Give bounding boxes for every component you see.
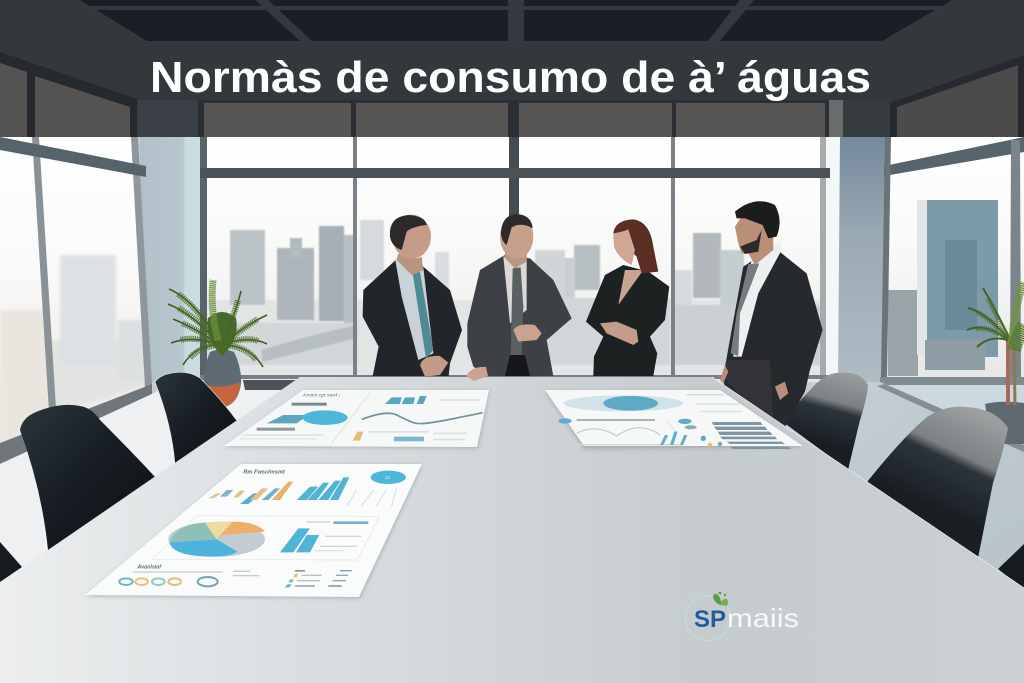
ceiling recess [80,0,952,41]
chair: left edge [0,542,22,582]
plant: left [168,280,267,407]
left column in band [137,100,198,137]
person 4: man with beard [720,201,823,430]
bar chart: mixed [208,482,293,504]
window sill right [885,385,1024,447]
logo text: SP [694,606,726,633]
conference table [0,377,1024,683]
document: near report with charts [85,464,422,598]
upper left panes [0,52,140,137]
document: near report with charts: 12 [385,475,391,480]
logo leaves [713,592,728,606]
right wall column [838,137,888,382]
bar chart: outline [347,488,397,506]
left window [0,137,152,464]
right column in band [843,100,890,137]
person 2: man in grey suit [467,214,572,376]
ring indicators [119,577,218,586]
logo: SPmaiis: maiis [727,603,799,633]
person 3: woman [586,219,669,376]
ceiling beams [86,0,946,41]
plant pot [204,350,241,407]
skyline [207,220,827,376]
bar chart: blue [297,477,349,500]
floor right [700,382,1024,620]
chart panel frame [152,516,379,560]
document heading: Kmsm cpr swsf ♩ [303,393,343,399]
chair: far right back [783,372,868,470]
badge [371,471,406,484]
left wall column [140,137,200,382]
upper centre panes [198,100,832,137]
person 1: man with teal tie [363,215,462,377]
sill behind left plant [243,380,300,390]
logo: SPmaiis [686,592,799,640]
logo ring [686,596,730,640]
window frames [200,137,207,380]
person 2 hand on table [466,367,488,381]
upper right panes [890,55,1024,137]
centre window with skyline [198,137,840,382]
leaves [967,282,1024,405]
leaves [168,280,267,367]
title: Normàs de consumo de à’ águas [150,53,871,102]
legend [285,570,352,587]
document: far right report [545,390,803,449]
chair: near left back [20,405,156,550]
section heading: Avanlslaf [136,564,162,570]
floor left [0,382,320,620]
table edge highlight [712,377,1024,588]
document: far left report [224,390,489,448]
document heading: Rm Fwsclmsmt [243,469,286,475]
chair: near right back [867,407,1008,558]
right window [880,137,1024,385]
chairs behind table [0,372,1024,590]
plant: right [967,282,1024,444]
title band with darkened ceiling and upper windows [0,0,1024,137]
bar chart: large bars [280,528,319,552]
business people [363,201,823,430]
plant pot [985,402,1024,444]
chair: far left back [155,372,238,465]
chair: right edge [998,544,1024,590]
pie chart [168,521,265,557]
